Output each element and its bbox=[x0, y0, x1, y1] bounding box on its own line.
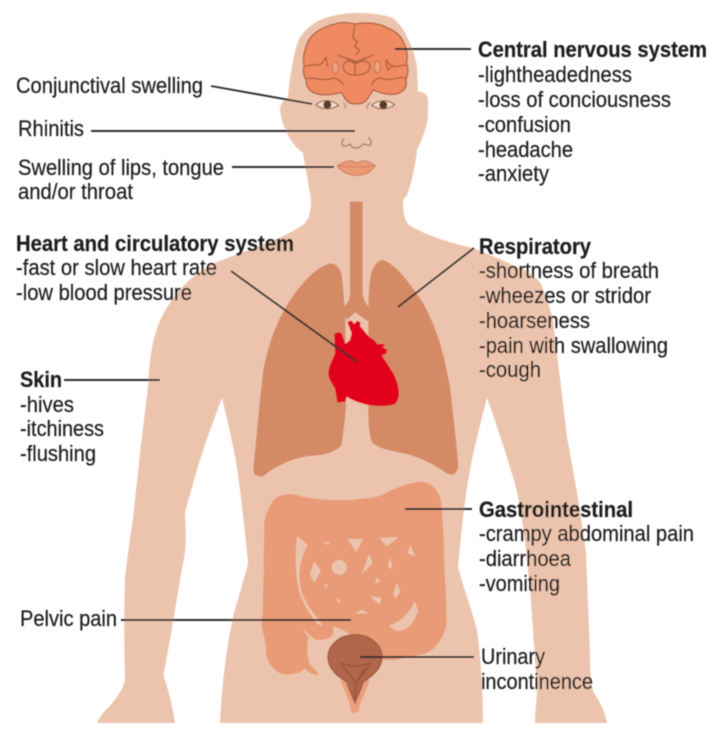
heart bbox=[328, 321, 399, 406]
text: skin: -itchiness bbox=[20, 416, 104, 441]
urethra bbox=[340, 680, 370, 713]
text: respiratory bbox=[479, 234, 668, 382]
text: skin: -flushing bbox=[20, 441, 96, 466]
text: swelling of lips: and/or throat bbox=[18, 179, 134, 204]
nose bbox=[342, 137, 371, 148]
line: urinary incontinence bbox=[360, 656, 474, 658]
line: respiratory bbox=[398, 248, 474, 307]
intestines bbox=[262, 482, 447, 675]
colon and small bowel bbox=[262, 482, 447, 675]
text: respiratory: Respiratory bbox=[479, 234, 591, 259]
left lung bbox=[253, 263, 346, 476]
bladder bbox=[328, 635, 382, 703]
lips bbox=[337, 161, 375, 175]
text: gastrointestinal bbox=[479, 497, 694, 596]
text: heart and circulatory system: Heart and circulatory system bbox=[16, 231, 294, 256]
text: respiratory: -wheezes or stridor bbox=[479, 283, 651, 308]
text: rhinitis: Rhinitis bbox=[18, 116, 84, 141]
text: central nervous system: -lightheadedness bbox=[478, 62, 632, 87]
text: skin: -hives bbox=[20, 392, 74, 417]
human body figure bbox=[97, 13, 607, 723]
text: central nervous system bbox=[478, 37, 707, 186]
brain bbox=[303, 22, 408, 104]
line: heart bbox=[231, 271, 357, 362]
text: urinary incontinence: incontinence bbox=[481, 669, 593, 694]
text: respiratory: -hoarseness bbox=[479, 308, 590, 333]
text: gastrointestinal: -vomiting bbox=[479, 571, 560, 596]
body silhouette bbox=[97, 13, 607, 723]
text: pelvic pain: Pelvic pain bbox=[20, 606, 117, 631]
line: central nervous system bbox=[395, 48, 471, 50]
text: gastrointestinal: Gastrointestinal bbox=[479, 497, 633, 522]
text: swelling of lips: Swelling of lips, tongue bbox=[18, 155, 224, 180]
line: skin bbox=[64, 379, 160, 381]
line: gastrointestinal bbox=[405, 508, 472, 510]
text: respiratory: -shortness of breath bbox=[479, 258, 659, 283]
text: gastrointestinal: -diarrhoea bbox=[479, 546, 571, 571]
line: conjunctival swelling bbox=[211, 86, 312, 104]
text: urinary incontinence bbox=[481, 644, 593, 694]
text: heart and circulatory system bbox=[16, 231, 294, 305]
right lung bbox=[368, 260, 458, 475]
text: urinary incontinence: Urinary bbox=[481, 644, 546, 669]
text: central nervous system: -headache bbox=[478, 137, 573, 162]
text: heart and circulatory system: -low blood pressure bbox=[16, 280, 192, 305]
leader lines bbox=[64, 49, 474, 657]
line: pelvic pain bbox=[121, 619, 351, 621]
eyes bbox=[316, 101, 395, 109]
line: lips bbox=[232, 166, 334, 168]
text: skin: Skin bbox=[20, 367, 62, 392]
trachea bbox=[343, 202, 370, 322]
text: respiratory: -pain with swallowing bbox=[479, 333, 668, 358]
text: gastrointestinal: -crampy abdominal pain bbox=[479, 521, 694, 546]
line: rhinitis bbox=[91, 130, 355, 132]
text: central nervous system: -anxiety bbox=[478, 161, 550, 186]
text: skin bbox=[20, 367, 104, 466]
lungs and trachea bbox=[253, 202, 458, 476]
text: central nervous system: -confusion bbox=[478, 112, 571, 137]
text: heart and circulatory system: -fast or slow heart rate bbox=[16, 255, 217, 280]
text: conjunctival swelling: Conjunctival swelling bbox=[16, 73, 203, 98]
text: respiratory: -cough bbox=[479, 357, 541, 382]
text: central nervous system: -loss of conciousness bbox=[478, 87, 671, 112]
text: swelling of lips bbox=[18, 155, 224, 204]
